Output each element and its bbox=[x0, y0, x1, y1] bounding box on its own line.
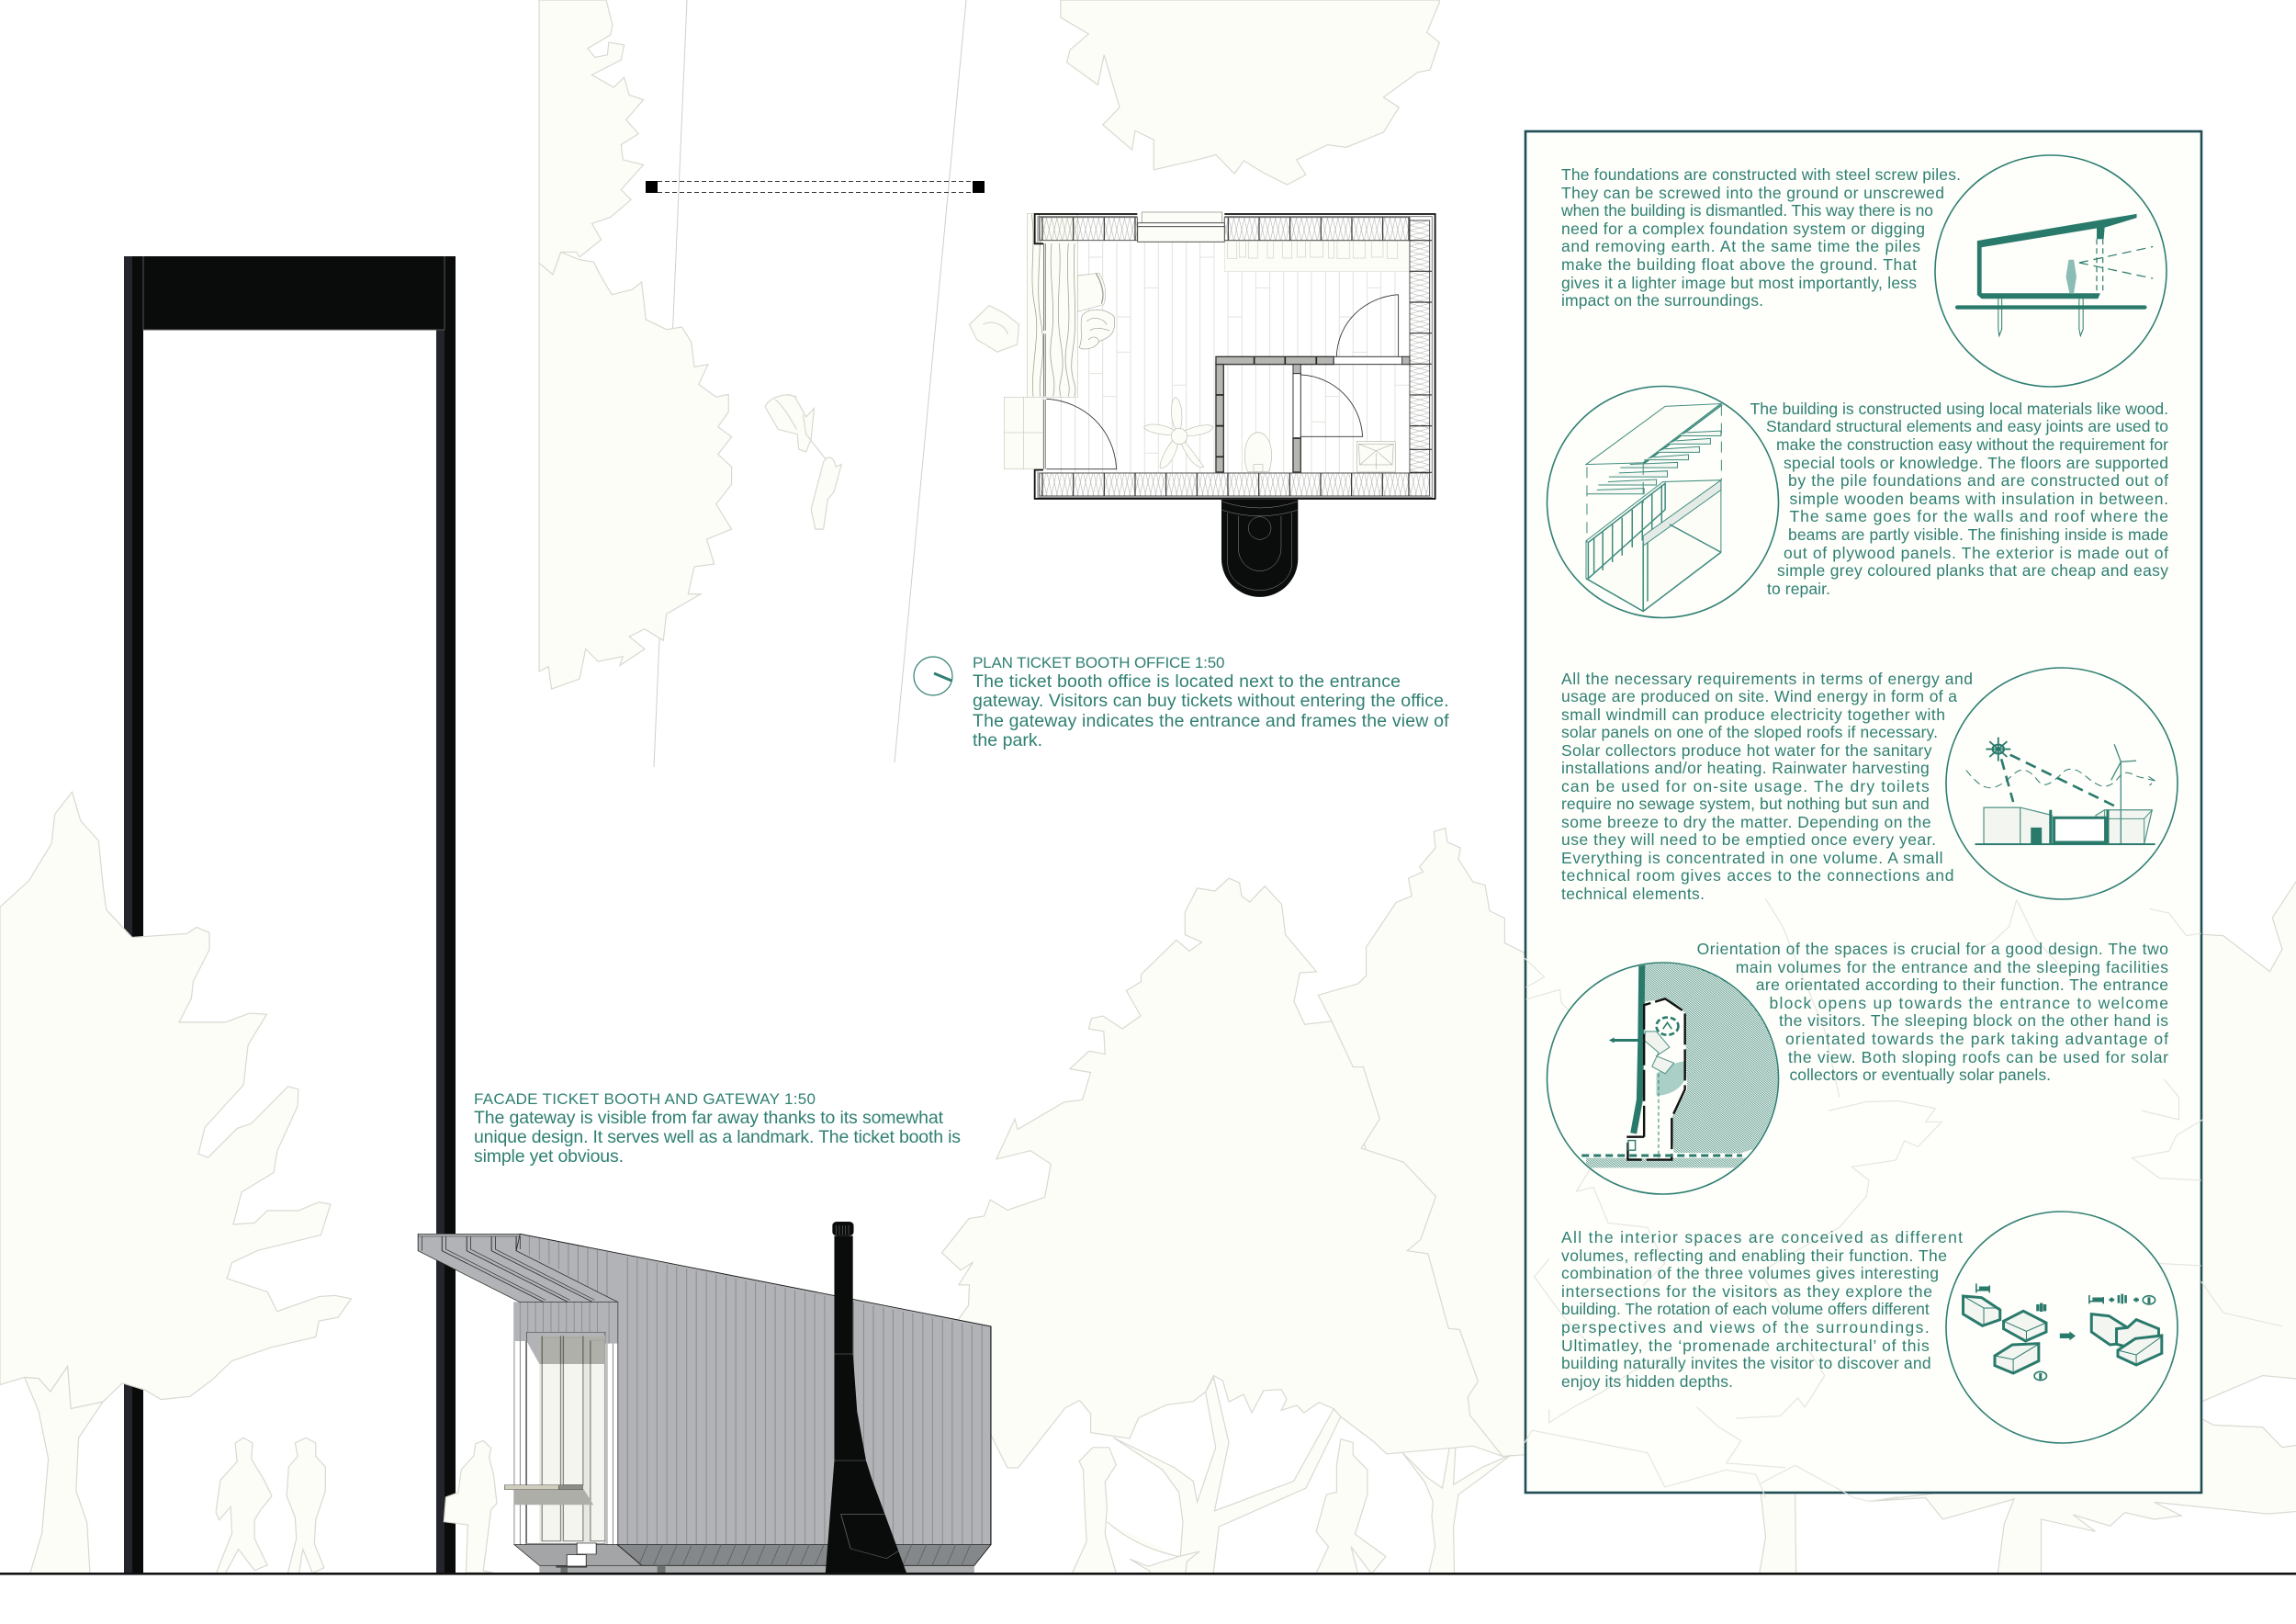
panel text: materials: simple grey coloured planks that are cheap and easy bbox=[1777, 561, 2168, 580]
facade caption bbox=[474, 1090, 961, 1167]
entrance recess bbox=[504, 1302, 617, 1545]
far right tree bbox=[1869, 882, 2296, 1580]
ground line bbox=[0, 1573, 2296, 1575]
panel text: orientation: the view. Both sloping roofs can be used for solar bbox=[1788, 1048, 2168, 1066]
base bbox=[514, 1543, 991, 1573]
panel text: foundations: gives it a lighter image but most importantly, less bbox=[1561, 274, 1917, 292]
plan caption bbox=[914, 654, 1449, 750]
counter shelf bbox=[504, 1485, 593, 1505]
toilet bbox=[1244, 433, 1272, 471]
plan caption: gateway. Visitors can buy tickets without entering the office. bbox=[973, 691, 1449, 711]
panel text: foundations: when the building is dismantled. This way there is no bbox=[1560, 201, 1933, 220]
panel text: volumes: volumes, reflecting and enabling their function. The bbox=[1561, 1246, 1947, 1265]
roof rafters bbox=[418, 1234, 617, 1302]
shower bbox=[1356, 442, 1395, 472]
panel text: energy: All the necessary requirements in terms of energy and bbox=[1561, 670, 1973, 688]
panel text: volumes: enjoy its hidden depths. bbox=[1561, 1372, 1733, 1391]
panel text: materials: The building is constructed using local materials like wood. bbox=[1750, 400, 2168, 418]
panel text: energy: technical room gives acces to the connections and bbox=[1561, 866, 1954, 885]
panel text: energy: use they will need to be emptied once every year. bbox=[1561, 830, 1936, 849]
white strip below ground bbox=[0, 1573, 2296, 1624]
panel text: volumes: intersections for the visitors as they explore the bbox=[1561, 1282, 1932, 1301]
panel text: materials: simple wooden beams with insulation in between. bbox=[1789, 490, 2168, 508]
panel text: volumes: combination of the three volumes gives interesting bbox=[1561, 1264, 1939, 1282]
panel text: volumes: building. The rotation of each volume offers different bbox=[1561, 1300, 1930, 1318]
panel text: materials: make the construction easy without the requirement for bbox=[1776, 435, 2168, 454]
panel text: foundations: make the building float above the ground. That bbox=[1561, 255, 1917, 274]
panel text: orientation: are orientated according to their function. The entrance bbox=[1756, 976, 2168, 994]
door swings bbox=[1046, 295, 1399, 469]
panel text: foundations: The foundations are constructed with steel screw piles. bbox=[1561, 165, 1961, 184]
plan caption: The gateway indicates the entrance and frames the view of bbox=[973, 711, 1449, 731]
panel text: materials: to repair. bbox=[1767, 580, 1830, 598]
person and dog from above bbox=[765, 394, 841, 529]
tree plan: middle left bbox=[539, 252, 732, 689]
panel text: orientation: main volumes for the entrance and the sleeping facilities bbox=[1736, 958, 2168, 976]
panel text: volumes bbox=[1561, 1228, 1963, 1391]
exterior walls bbox=[1035, 214, 1435, 499]
ticket booth elevation bbox=[418, 1222, 991, 1573]
left foreground tree trunk bbox=[25, 1366, 103, 1577]
panel text: volumes: Ultimatley, the ‘promenade architectural’ of this bbox=[1561, 1336, 1930, 1355]
plan caption: PLAN TICKET BOOTH OFFICE 1:50 bbox=[973, 654, 1225, 671]
panel text: energy: installations and/or heating. Rainwater harvesting bbox=[1561, 759, 1930, 777]
window bbox=[1138, 212, 1224, 242]
tree plan: top right bbox=[1061, 0, 1439, 185]
panel text: orientation: the visitors. The sleeping block on the other hand is bbox=[1779, 1011, 2168, 1030]
two walking people bbox=[215, 1438, 325, 1577]
circle icon: pile section bbox=[1935, 155, 2167, 387]
orientation mark bbox=[914, 657, 952, 695]
tree 3 behind panel bbox=[1318, 829, 1556, 1457]
siding bbox=[516, 1234, 991, 1545]
panel text: foundations bbox=[1560, 165, 1961, 310]
panel text: foundations: need for a complex foundation system or digging bbox=[1561, 220, 1925, 238]
people and dog under trees bbox=[1070, 1439, 1386, 1578]
panel text: orientation: orientated towards the park taking advantage of bbox=[1785, 1030, 2168, 1048]
pot plant bbox=[1144, 398, 1213, 468]
chair and seated clerk bbox=[1077, 273, 1115, 349]
panel text: materials: beams are partly visible. The finishing inside is made bbox=[1788, 525, 2168, 544]
panel text: energy: usage are produced on site. Wind energy in form of a bbox=[1561, 687, 1957, 705]
panel text: materials: Standard structural elements and easy joints are used to bbox=[1766, 417, 2168, 435]
tree 2 canopy bbox=[942, 878, 1503, 1468]
panel text: energy: require no sewage system, but nothing but sun and bbox=[1561, 795, 1930, 813]
plan caption: the park. bbox=[973, 730, 1042, 750]
panel text: energy: small windmill can produce electricity together with bbox=[1561, 705, 1945, 724]
facade caption: FACADE TICKET BOOTH AND GATEWAY 1:50 bbox=[474, 1090, 816, 1108]
entrance step bbox=[1004, 397, 1043, 469]
panel text: energy: technical elements. bbox=[1561, 885, 1705, 903]
window bbox=[526, 1332, 605, 1543]
person at counter from above bbox=[970, 306, 1019, 352]
plan path line: right bbox=[895, 0, 966, 762]
tree 2 trunk bbox=[1113, 1377, 1341, 1578]
panel text: volumes: perspectives and views of the surroundings. bbox=[1561, 1318, 1930, 1336]
panel text: volumes: building naturally invites the visitor to discover and bbox=[1561, 1354, 1931, 1372]
gateway frame elevation bbox=[124, 256, 456, 1573]
facade caption: unique design. It serves well as a landmark. The ticket booth is bbox=[474, 1127, 961, 1147]
panel text: orientation: block opens up towards the entrance to welcome bbox=[1769, 994, 2168, 1012]
glazing and interior partitions bbox=[1044, 243, 1410, 472]
circle icon: site orientation bbox=[1547, 961, 1788, 1194]
panel text: energy: solar panels on one of the sloped roofs if necessary. bbox=[1561, 723, 1938, 741]
plan caption: The ticket booth office is located next to the entrance bbox=[973, 671, 1401, 692]
panel text: foundations: They can be screwed into the ground or unscrewed bbox=[1561, 184, 1944, 202]
panel text: energy bbox=[1561, 670, 1973, 903]
panel text: foundations: impact on the surroundings. bbox=[1561, 291, 1763, 310]
panel text: materials: The same goes for the walls and roof where the bbox=[1789, 507, 2168, 525]
tree 3 trunk bbox=[1402, 1448, 1511, 1578]
panel text: materials bbox=[1750, 400, 2168, 598]
floor boards bbox=[1061, 242, 1410, 473]
facade caption: The gateway is visible from far away thanks to its somewhat bbox=[474, 1108, 944, 1128]
panel text: orientation: Orientation of the spaces is crucial for a good design. The two bbox=[1697, 940, 2168, 958]
circle icon: exploded structure bbox=[1547, 386, 1778, 617]
stove chimney bbox=[826, 1222, 906, 1573]
black stove bbox=[1221, 500, 1298, 597]
arrow bbox=[2060, 1331, 2076, 1340]
panel text: energy: Solar collectors produce hot water for the sanitary bbox=[1561, 741, 1932, 760]
circle icon: volumes bbox=[1946, 1212, 2178, 1443]
panel text: materials: by the pile foundations and are constructed out of bbox=[1788, 471, 2168, 490]
tree plan: top left bbox=[539, 0, 644, 275]
facade caption: simple yet obvious. bbox=[474, 1146, 624, 1167]
tree outlines showing through panel bbox=[1525, 899, 2282, 1501]
floor plan bbox=[1004, 212, 1435, 597]
circle icon: energy bbox=[1946, 668, 2178, 899]
panel text: energy: Everything is concentrated in one volume. A small bbox=[1561, 849, 1943, 867]
three separate volumes bbox=[1964, 1296, 2046, 1373]
gateway posts in plan bbox=[646, 181, 985, 193]
panel background bbox=[1525, 131, 2201, 1493]
left foreground tree canopy bbox=[0, 792, 351, 1408]
hanging rail bbox=[1224, 242, 1410, 272]
symbols bbox=[1976, 1283, 2155, 1381]
panel text: foundations: and removing earth. At the same time the piles bbox=[1561, 237, 1920, 255]
panel text: materials: special tools or knowledge. The floors are supported bbox=[1784, 454, 2168, 472]
trunk below panel bbox=[1758, 1493, 1796, 1580]
panel text: energy: can be used for on-site usage. The dry toilets bbox=[1561, 777, 1930, 795]
panel text: volumes: All the interior spaces are conceived as different bbox=[1561, 1228, 1963, 1246]
person at ticket counter bbox=[444, 1440, 497, 1573]
panel text: orientation bbox=[1697, 940, 2168, 1084]
panel text: energy: some breeze to dry the matter. Depending on the bbox=[1561, 813, 1931, 831]
panel text: orientation: collectors or eventually solar panels. bbox=[1789, 1066, 2051, 1084]
plan path line: left bbox=[654, 0, 687, 767]
combined volumes bbox=[2091, 1314, 2162, 1365]
panel text: materials: out of plywood panels. The exterior is made out of bbox=[1784, 544, 2168, 562]
counter with wood grain bbox=[1027, 213, 1077, 397]
